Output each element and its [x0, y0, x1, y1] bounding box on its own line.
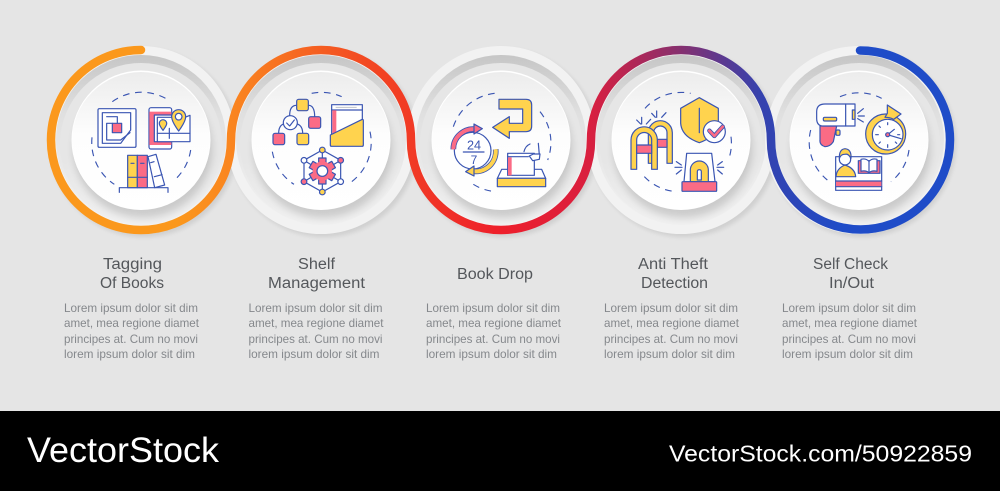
text block 1: amet, mea regione diamet [64, 316, 200, 330]
heading: Anti Theft Detection: Anti Theft [638, 256, 709, 273]
heading: Tagging Of Books [100, 256, 164, 292]
text block 4: Lorem ipsum dolor sit dim [604, 301, 738, 315]
text block 1: principes at. Cum no movi [64, 332, 198, 346]
icon part: security gates [631, 111, 672, 169]
text block 3: principes at. Cum no movi [426, 332, 560, 346]
circle base 1 [47, 46, 238, 237]
text block 1 [64, 301, 200, 361]
text block 5: lorem ipsum dolor sit dim [782, 347, 913, 361]
circle base 2 [227, 46, 418, 237]
text block 1: lorem ipsum dolor sit dim [64, 347, 195, 361]
icon part: clock with arrow [866, 105, 906, 154]
footer image id: VectorStock.com/50922859 [669, 440, 972, 466]
text block 2: principes at. Cum no movi [248, 332, 382, 346]
icon: shelf management [272, 92, 371, 195]
icon part: library card [836, 149, 882, 190]
text block 3 [426, 301, 562, 361]
icon part: RFID tag [98, 109, 136, 147]
heading: Tagging Of Books: Of Books [100, 275, 164, 292]
text block 5 [782, 301, 918, 361]
icon: book drop [453, 93, 551, 191]
icon part: drop box with book [497, 143, 546, 187]
text block 5: Lorem ipsum dolor sit dim [782, 301, 916, 315]
circle base 4 [587, 46, 778, 237]
heading: Shelf Management: Management [268, 275, 366, 292]
heading: Anti Theft Detection [638, 256, 709, 292]
text block 4 [604, 301, 740, 361]
icon part: books on shelf [119, 154, 168, 192]
icon part: return arrow [493, 99, 532, 138]
circle base 3 [407, 46, 598, 237]
icon part: 24/7 clock [453, 124, 496, 176]
icon: self check in/out [809, 93, 909, 190]
serpentine gradient ribbon [51, 50, 950, 230]
icon part: phone with map [149, 108, 190, 149]
text block 4: lorem ipsum dolor sit dim [604, 347, 735, 361]
circle base 5 [765, 46, 956, 237]
heading: Self Check In/Out: In/Out [829, 275, 875, 292]
heading: Shelf Management [268, 256, 366, 292]
text block 5: principes at. Cum no movi [782, 332, 916, 346]
icon part: 24/7 clock: 24 [467, 138, 481, 152]
heading: Self Check In/Out: Self Check [813, 256, 888, 273]
text block 1: Lorem ipsum dolor sit dim [64, 301, 198, 315]
heading: Book Drop: Book Drop [457, 266, 533, 283]
heading: Self Check In/Out [813, 256, 888, 292]
text block 5: amet, mea regione diamet [782, 316, 918, 330]
footer bar [0, 411, 1000, 491]
text block 2 [248, 301, 384, 361]
text block 2: Lorem ipsum dolor sit dim [248, 301, 382, 315]
heading: Shelf Management: Shelf [298, 256, 336, 273]
text block 4: principes at. Cum no movi [604, 332, 738, 346]
text block 3: amet, mea regione diamet [426, 316, 562, 330]
icon part: gear network [301, 147, 343, 195]
icon part: flow chart [273, 99, 321, 145]
text block 4: amet, mea regione diamet [604, 316, 740, 330]
text block 2: lorem ipsum dolor sit dim [248, 347, 380, 361]
text block 2: amet, mea regione diamet [248, 316, 384, 330]
text block 3: lorem ipsum dolor sit dim [426, 347, 557, 361]
icon part: barcode scanner [817, 104, 864, 147]
icon part: alarm beacon [675, 153, 724, 191]
heading: Tagging Of Books: Tagging [103, 256, 162, 273]
text block 3: Lorem ipsum dolor sit dim [426, 301, 560, 315]
icon: tagging of books [92, 92, 191, 192]
heading: Anti Theft Detection: Detection [641, 275, 708, 292]
icon part: shield with check [681, 98, 725, 143]
icon part: 24/7 clock: 7 [471, 153, 478, 167]
footer logo text: VectorStock [27, 431, 220, 470]
icon: anti theft detection [631, 92, 731, 191]
icon part: folder [330, 105, 363, 146]
